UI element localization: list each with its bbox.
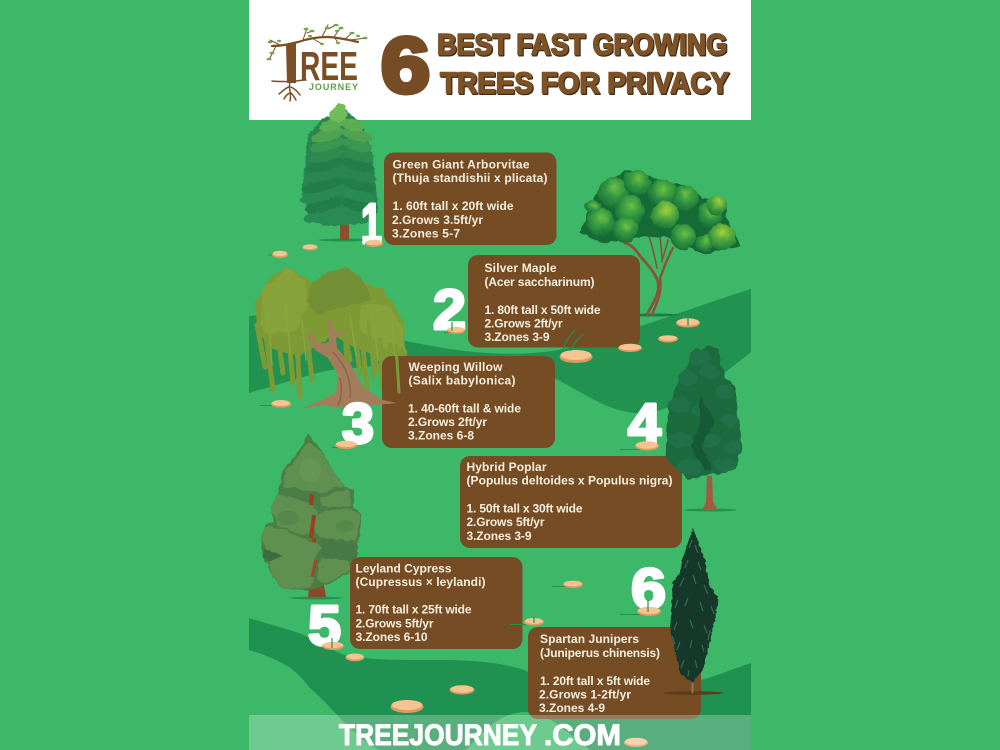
panel: tree 4 info box: 3.Zones 3-9: [466, 529, 532, 543]
foliage: [670, 528, 718, 683]
hanging strands: [257, 325, 402, 397]
panel: tree 2 info box: 3.Zones 3-9: [484, 330, 550, 344]
panel: tree 1 info box: 1. 60ft tall x 20ft wide: [392, 199, 514, 213]
canopy: [580, 170, 740, 255]
panel: tree 4 info box: Hybrid Poplar: [466, 460, 547, 474]
tree 3 trunk: Weeping Willow: [300, 320, 399, 409]
logo: Tree Journey: [266, 24, 368, 101]
panel: tree 2 info box: (Acer saccharinum): [484, 275, 594, 289]
panel: tree 3 info box: Weeping Willow: [408, 360, 503, 374]
background hills: [249, 289, 751, 750]
logo leaves: [266, 24, 368, 60]
ground shadow: [624, 314, 680, 316]
panel: tree 2 info box: Silver Maple: [484, 261, 557, 275]
foliage: [665, 344, 742, 480]
stepping stones: [260, 240, 700, 747]
tree 1: Green Giant Arborvitae: [298, 103, 378, 242]
tree 3 canopy: Weeping Willow: [255, 267, 407, 397]
back strands: [255, 267, 407, 380]
foliage fronds: [298, 103, 378, 226]
header band: [249, 0, 751, 120]
number 1: 1: [361, 192, 382, 256]
panel: tree 2 info box: 1. 80ft tall x 50ft wide: [484, 303, 601, 317]
tree 5: Leyland Cypress: [262, 434, 362, 600]
footer band: [249, 715, 751, 750]
panel: tree 3 info box: (Salix babylonica): [408, 374, 516, 388]
panel: tree 3 info box: [382, 356, 555, 448]
panel: tree 4 info box: 1. 50ft tall x 30ft wide: [466, 502, 583, 516]
foliage lumps: [262, 434, 362, 590]
title line 1: BEST FAST GROWING: [437, 28, 727, 62]
trunk and branches: [625, 233, 673, 315]
panel: tree 1 info box: Green Giant Arborvitae: [392, 158, 530, 172]
panel: tree 3 info box: 3.Zones 6-8: [408, 428, 474, 442]
panel: tree 5 info box: 2.Grows 5ft/yr: [356, 616, 434, 630]
logo twigs: [270, 25, 366, 58]
panel: tree 6 info box: 1. 20ft tall x 5ft wide: [540, 674, 650, 688]
number 6: 6: [631, 557, 666, 621]
tree 4: Hybrid Poplar: [665, 344, 742, 512]
logo word JOURNEY: JOURNEY: [309, 82, 358, 92]
panel: tree 6 info box: Spartan Junipers: [540, 632, 639, 646]
panel: tree 6 info box: 3.Zones 4-9: [539, 701, 605, 715]
title line 1 shadow: BEST FAST GROWING: [438, 30, 728, 62]
panel: tree 5 info box: 1. 70ft tall x 25ft wide: [356, 602, 472, 616]
tree 6: Spartan Juniper: [663, 528, 723, 695]
number 5: 5: [308, 594, 341, 658]
panel: tree 3 info box: 1. 40-60ft tall & wide: [408, 402, 521, 416]
panel: tree 1 info box: 3.Zones 5-7: [392, 226, 460, 240]
number 3: 3: [342, 392, 374, 456]
panel: tree 1 info box: [384, 152, 556, 245]
title line 2 shadow: TREES FOR PRIVACY: [441, 68, 730, 101]
panel: tree 2 info box: [468, 255, 640, 348]
tree 2: Silver Maple: [580, 170, 740, 316]
panel: tree 1 info box: (Thuja standishii x plicata): [392, 171, 548, 185]
panel: tree 5 info box: [350, 557, 522, 649]
logo T stem and main branch: [286, 42, 296, 83]
panel: tree 5 info box: (Cupressus × leylandi): [356, 575, 486, 589]
panel: tree 6 info box: [528, 627, 701, 719]
logo roots: [272, 80, 306, 101]
title line 2: TREES FOR PRIVACY: [440, 67, 729, 100]
panel: tree 4 info box: (Populus deltoides x Populus nigra): [466, 474, 672, 488]
title: [381, 21, 730, 109]
panel: tree 6 info box: (Juniperus chinensis): [540, 646, 660, 660]
title numeral 6: 6: [381, 21, 430, 109]
panel: tree 6 info box: 2.Grows 1-2ft/yr: [539, 688, 631, 702]
number 2: 2: [433, 278, 466, 342]
panel: tree 5 info box: Leyland Cypress: [356, 562, 452, 576]
panel: tree 5 info box: 3.Zones 6-10: [356, 630, 428, 644]
number 4: 4: [628, 392, 661, 456]
panel: tree 2 info box: 2.Grows 2ft/yr: [484, 316, 563, 330]
panel: tree 4 info box: 2.Grows 5ft/yr: [466, 515, 545, 529]
trunk: [702, 476, 718, 510]
logo word REE: REE: [300, 43, 358, 89]
panel: tree 1 info box: 2.Grows 3.5ft/yr: [392, 213, 483, 227]
panel: tree 3 info box: 2.Grows 2ft/yr: [408, 415, 487, 429]
panel: tree 4 info box: [460, 456, 682, 548]
